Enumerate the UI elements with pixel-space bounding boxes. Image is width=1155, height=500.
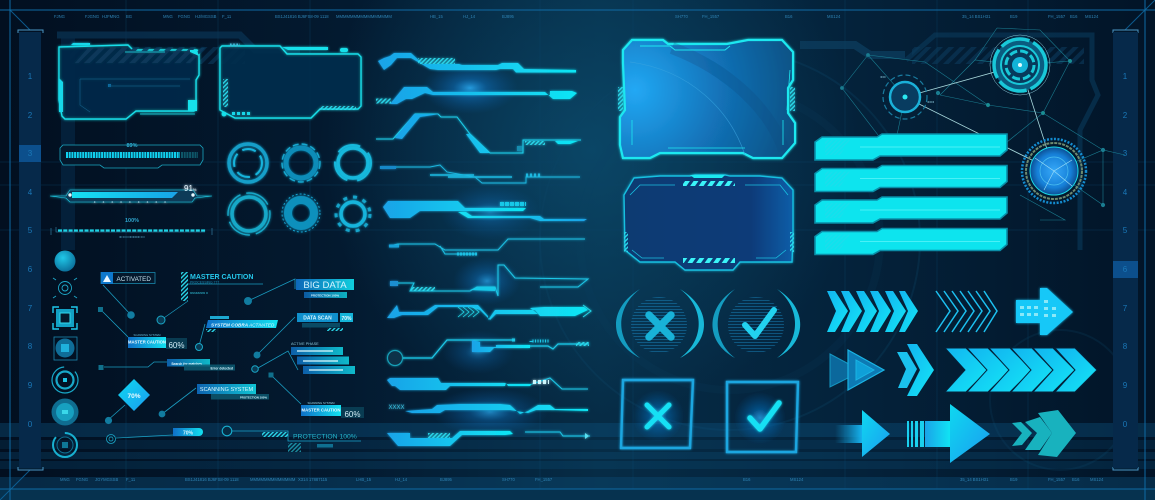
hud line 7 xyxy=(390,265,588,296)
horizontal scan bands xyxy=(0,423,1155,500)
bar three xyxy=(815,197,1007,223)
callout: master caution 60% left: MASTER CAUTION xyxy=(128,340,166,344)
top tiny readout text: MS124 xyxy=(827,14,841,19)
bottom tiny readout text: MS124 xyxy=(790,477,804,482)
hud line 1 xyxy=(378,53,576,72)
left number column xyxy=(19,32,41,468)
icon: circular check xyxy=(712,289,800,358)
gauge five xyxy=(282,194,320,232)
hud line 4 xyxy=(380,165,580,183)
icon: circular cross xyxy=(616,289,704,358)
hud line 11 xyxy=(388,404,588,414)
left number column: 6 xyxy=(28,265,33,274)
bottom tiny readout text: FH_1557 xyxy=(535,477,553,482)
hud line 11: XXXX xyxy=(388,405,405,411)
top tiny readout text: SH770 xyxy=(675,14,688,19)
hud line 6 xyxy=(389,239,585,254)
radar: bright xyxy=(1022,139,1086,203)
gauge four xyxy=(228,193,270,235)
progress bar 89% xyxy=(60,143,203,168)
icon: teal disc xyxy=(52,398,78,426)
left number column: 0 xyxy=(28,420,33,429)
callout: 70% diamond: 70% xyxy=(127,393,141,400)
callout: data scan xyxy=(254,313,353,358)
bottom tiny readout text: BJ895 xyxy=(440,477,453,482)
bottom tiny readout text: F_11 xyxy=(126,477,136,482)
bottom tiny readout text: JGYMGSSB xyxy=(95,477,118,482)
callout: master caution 60% right xyxy=(268,372,364,419)
callout: data scan: DATA SCAN xyxy=(303,316,332,322)
callout: scanning system: SCANNING SYSTEM xyxy=(200,387,253,393)
callout: master caution 60% left: 60% xyxy=(168,341,185,350)
callout: master caution 60% right: MASTER CAUTION xyxy=(302,408,340,412)
icon: square cross xyxy=(621,380,693,448)
icon: ball xyxy=(54,250,76,272)
left number column: 3 xyxy=(28,149,33,158)
callout: master caution 60% left: SCANNING SYSTEM xyxy=(133,333,161,337)
top tiny readout text: B16 xyxy=(1070,14,1078,19)
callout: search for matches: Search for matches... xyxy=(171,362,205,366)
left number column: 8 xyxy=(28,342,33,351)
arrow: fading xyxy=(835,410,890,457)
icon: ring target xyxy=(52,367,78,393)
hud line 5 xyxy=(383,201,587,221)
top tiny readout text: HJFMNG xyxy=(102,14,119,19)
cyan stepped bars xyxy=(815,134,1007,254)
callout: active phase: ACTIVE PHASE xyxy=(291,342,319,346)
right number column: 2 xyxy=(1123,111,1128,120)
panel: frame two xyxy=(220,45,361,118)
right number column: 9 xyxy=(1123,381,1128,390)
bottom tiny readout text: B16 xyxy=(743,477,751,482)
right number column: 5 xyxy=(1123,226,1128,235)
icon: target xyxy=(53,278,77,298)
bar one xyxy=(815,134,1007,160)
gauge one xyxy=(229,144,267,182)
right number column: 7 xyxy=(1123,304,1128,313)
top tiny readout text: HJ/MGSSB xyxy=(195,14,217,19)
bottom tiny readout text: X314 17887115 xyxy=(298,477,328,482)
callout: data scan: 70% xyxy=(341,316,352,322)
callout: master caution title xyxy=(157,272,263,324)
bottom tiny readout text: MMMMMMMMMMMMM xyxy=(250,477,296,482)
top tiny readout text: FH_1557 xyxy=(702,14,720,19)
arrow: teal chevrons xyxy=(1012,410,1076,457)
progress bar 91%: 91% xyxy=(184,184,197,193)
top tiny readout text xyxy=(54,14,1099,19)
bottom tiny readout text: SH770 xyxy=(502,477,515,482)
left number column: 7 xyxy=(28,304,33,313)
arrow: large chevron row xyxy=(945,348,1097,392)
top tiny readout text: B16 xyxy=(785,14,793,19)
top tiny readout text: HB_15 xyxy=(430,14,443,19)
bottom tiny readout text: BS1J41816 BJ6FS8-09 1118 xyxy=(185,477,239,482)
callout: master caution title: MASTER CAUTION xyxy=(190,274,253,281)
right number column: 0 xyxy=(1123,420,1128,429)
top tiny readout text: B19 xyxy=(1010,14,1018,19)
gauge two xyxy=(282,144,320,182)
bar four xyxy=(815,228,1007,254)
progress bar 89%: 89% xyxy=(126,143,138,149)
bottom tiny readout text: MNG xyxy=(60,477,70,482)
left number column: 4 xyxy=(28,188,33,197)
network lines xyxy=(840,28,1125,220)
callout: 70% pill xyxy=(106,428,203,444)
top tiny readout text: HJ_14 xyxy=(463,14,476,19)
bottom tiny readout text: 35_14 BS1H31 xyxy=(960,477,989,482)
callout: protection 100%: PROTECTION 100% xyxy=(293,434,357,440)
icon column xyxy=(52,250,78,457)
bottom tiny readout text: B19 xyxy=(1010,477,1018,482)
left number column: 2 xyxy=(28,111,33,120)
arrow: dotted block xyxy=(1016,288,1073,335)
centre glow spots xyxy=(422,62,548,436)
right number column: 3 xyxy=(1123,149,1128,158)
top tiny readout text: BJ895 xyxy=(502,14,515,19)
arrow: double triangle xyxy=(830,350,884,390)
callout: system cobra xyxy=(196,316,278,350)
top tiny readout text: MNG xyxy=(163,14,173,19)
top tiny readout text: FGNG xyxy=(178,14,190,19)
bar two xyxy=(815,166,1007,192)
bottom tiny readout text xyxy=(60,477,1104,482)
callout: system cobra: SYSTEM COBRA ACTIVATED xyxy=(211,322,275,328)
bottom tiny readout text: FGNG xyxy=(76,477,88,482)
radar: small xyxy=(880,75,934,119)
arrow: striped xyxy=(907,404,990,463)
radar: small: IIIIIIIIII xyxy=(927,100,934,104)
panel: large frame lower xyxy=(624,175,794,270)
callout: big data: PROTECTION 100% xyxy=(311,294,339,298)
icon: framed circle xyxy=(54,337,77,360)
circular gauges xyxy=(228,144,371,235)
callout: master caution 60% right: 60% xyxy=(344,410,361,419)
bottom tiny readout text: LHB_15 xyxy=(356,477,372,482)
callout: 70% pill: 70% xyxy=(183,430,194,436)
right number column: 4 xyxy=(1123,188,1128,197)
top tiny readout text: MS124 xyxy=(1085,14,1099,19)
callout: master caution title: PROCESSING 777 xyxy=(190,280,219,284)
callout: 70% diamond xyxy=(105,379,150,424)
callout: big data: BIG DATA xyxy=(303,280,347,291)
radar: top xyxy=(990,35,1050,95)
callout: master caution 60% left xyxy=(98,307,187,350)
progress bar 100% xyxy=(51,218,212,239)
left number column: 1 xyxy=(28,72,33,81)
top tiny readout text: BS1J41816 BJ6FS8-09 1118 xyxy=(275,14,329,19)
callout: activated: ACTIVATED xyxy=(116,276,151,283)
callout: scanning system xyxy=(159,384,269,417)
callout: big data xyxy=(244,279,354,305)
arrow: chevron row xyxy=(827,291,918,332)
progress bar 100%: IIII IIII II IIIIIIIIIIIIIIII III II xyxy=(119,235,145,239)
right number column xyxy=(1113,32,1138,468)
right number column: 1 xyxy=(1123,72,1128,81)
panel: large frame upper xyxy=(618,40,795,158)
radar: small: IIIIIIII xyxy=(880,75,886,79)
bottom tiny readout text: MS124 xyxy=(1090,477,1104,482)
bottom tiny readout text: FH_1557 xyxy=(1048,477,1066,482)
arrow: thin chevrons xyxy=(936,291,997,332)
panel: frame one xyxy=(59,43,205,119)
right number column: 6 xyxy=(1123,265,1128,274)
progress bar 91% xyxy=(50,184,212,202)
gauge six xyxy=(336,197,370,231)
icon: square check xyxy=(727,382,798,452)
arrow: double chevron xyxy=(897,344,934,396)
callout: master caution title: MMMMMMM III xyxy=(190,291,208,295)
callout: protection 100% xyxy=(222,426,361,452)
top tiny readout text: MMMMMMMMMMMMMMMM xyxy=(336,14,392,19)
left number column: 9 xyxy=(28,381,33,390)
icon: broken ring xyxy=(53,433,77,457)
callout: master caution 60% right: SCANNING SYSTEM xyxy=(307,401,335,405)
callout: scanning system: PROTECTION 100% xyxy=(240,396,267,400)
top tiny readout text: BG xyxy=(126,14,132,19)
callout: search for matches: Error detected xyxy=(210,366,233,370)
top tiny readout text: F_11 xyxy=(222,14,232,19)
top tiny readout text: FH_1557 xyxy=(1048,14,1066,19)
top tiny readout text: 35_14 BS1H31 xyxy=(962,14,991,19)
callout: search for matches xyxy=(98,359,235,370)
gauge three xyxy=(335,145,371,181)
top tiny readout text: FJGNG xyxy=(85,14,99,19)
bottom tiny readout text: HJ_14 xyxy=(395,477,408,482)
bottom tiny readout text: B16 xyxy=(1072,477,1080,482)
callout: activated xyxy=(101,272,155,319)
left number column: 5 xyxy=(28,226,33,235)
hud line 2 xyxy=(376,87,577,104)
callout: active phase xyxy=(252,342,355,374)
top tiny readout text: FJNG xyxy=(54,14,65,19)
hud line 3 xyxy=(376,114,581,153)
hud line 8 xyxy=(387,305,591,320)
icon: square target xyxy=(53,307,77,329)
progress bar 100%: 100% xyxy=(125,218,139,224)
right number column: 8 xyxy=(1123,342,1128,351)
hud line set xyxy=(376,53,591,446)
hud line 9 xyxy=(388,338,589,366)
hud line 10 xyxy=(387,378,588,390)
hud line 12 xyxy=(387,431,590,446)
